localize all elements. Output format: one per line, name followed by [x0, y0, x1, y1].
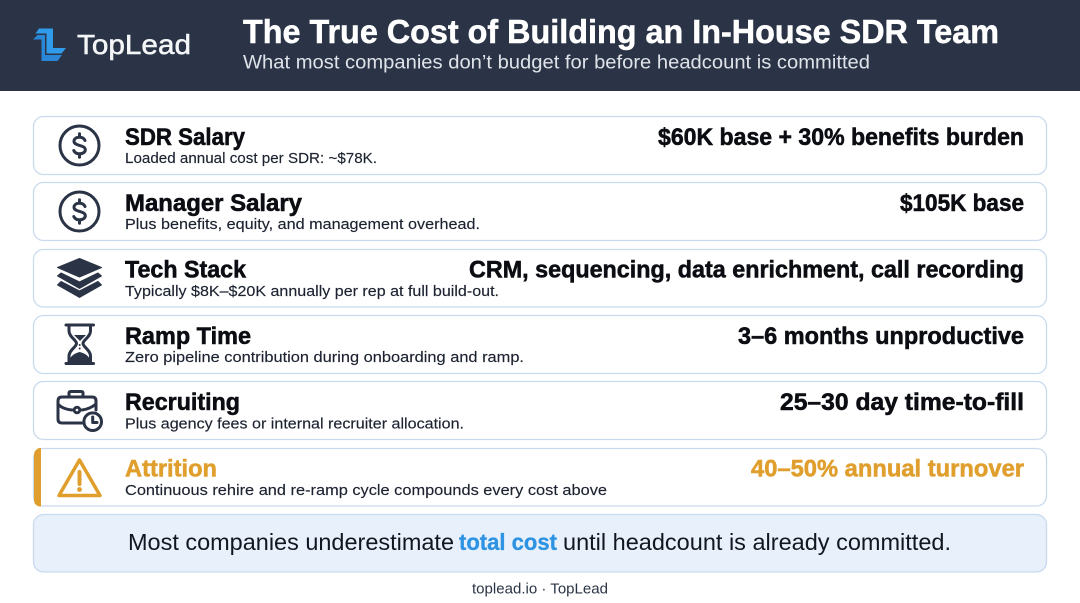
callout: Most companies underestimate — [128, 529, 454, 555]
accent bar — [34, 448, 41, 506]
title: The True Cost of Building an In-House SDR Team — [243, 13, 999, 50]
row description: Zero pipeline contribution during onboarding and ramp. — [125, 349, 524, 366]
row value: 40–50% annual turnover — [751, 456, 1024, 482]
row value: $105K base — [900, 190, 1024, 217]
icon: dollar — [60, 192, 99, 231]
row: Tech Stack — [34, 250, 1046, 307]
row description: Typically $8K–$20K annually per rep at full build-out. — [125, 283, 499, 300]
row: Recruiting — [34, 382, 1046, 440]
icon: hourglass — [66, 325, 94, 364]
row title: Tech Stack — [125, 256, 247, 284]
row title: Attrition — [125, 456, 217, 482]
icon: briefcase with clock — [58, 392, 101, 431]
row value: 25–30 day time-to-fill — [780, 389, 1024, 416]
row title: Recruiting — [125, 389, 240, 416]
row value: 3–6 months unproductive — [738, 323, 1024, 350]
callout: total cost — [459, 529, 557, 555]
row title: SDR Salary — [125, 124, 246, 151]
callout: until headcount is already committed. — [563, 529, 951, 555]
row: SDR Salary — [34, 116, 1046, 174]
row description: Plus benefits, equity, and management overhead. — [125, 216, 480, 233]
row title: Manager Salary — [125, 190, 303, 217]
logo wordmark: TopLead — [77, 29, 191, 60]
row: Manager Salary — [34, 182, 1046, 240]
logo — [33, 28, 191, 61]
row: Ramp Time — [34, 316, 1046, 374]
row title: Ramp Time — [125, 323, 251, 350]
row value: $60K base + 30% benefits burden — [658, 124, 1024, 151]
row: Attrition (highlighted) — [34, 448, 1046, 506]
subtitle: What most companies don’t budget for before headcount is committed — [243, 52, 870, 74]
callout — [34, 514, 1046, 572]
header band — [0, 0, 1080, 91]
icon: layers — [58, 258, 102, 298]
row description: Plus agency fees or internal recruiter allocation. — [125, 416, 464, 432]
icon: warning triangle — [59, 460, 100, 496]
row description: Continuous rehire and re-ramp cycle compounds every cost above — [125, 482, 607, 499]
row value: CRM, sequencing, data enrichment, call recording — [469, 256, 1024, 284]
logo mark — [33, 28, 66, 61]
footer: toplead.io · TopLead — [472, 580, 608, 598]
row description: Loaded annual cost per SDR: ~$78K. — [125, 150, 377, 167]
icon: dollar — [60, 126, 99, 165]
